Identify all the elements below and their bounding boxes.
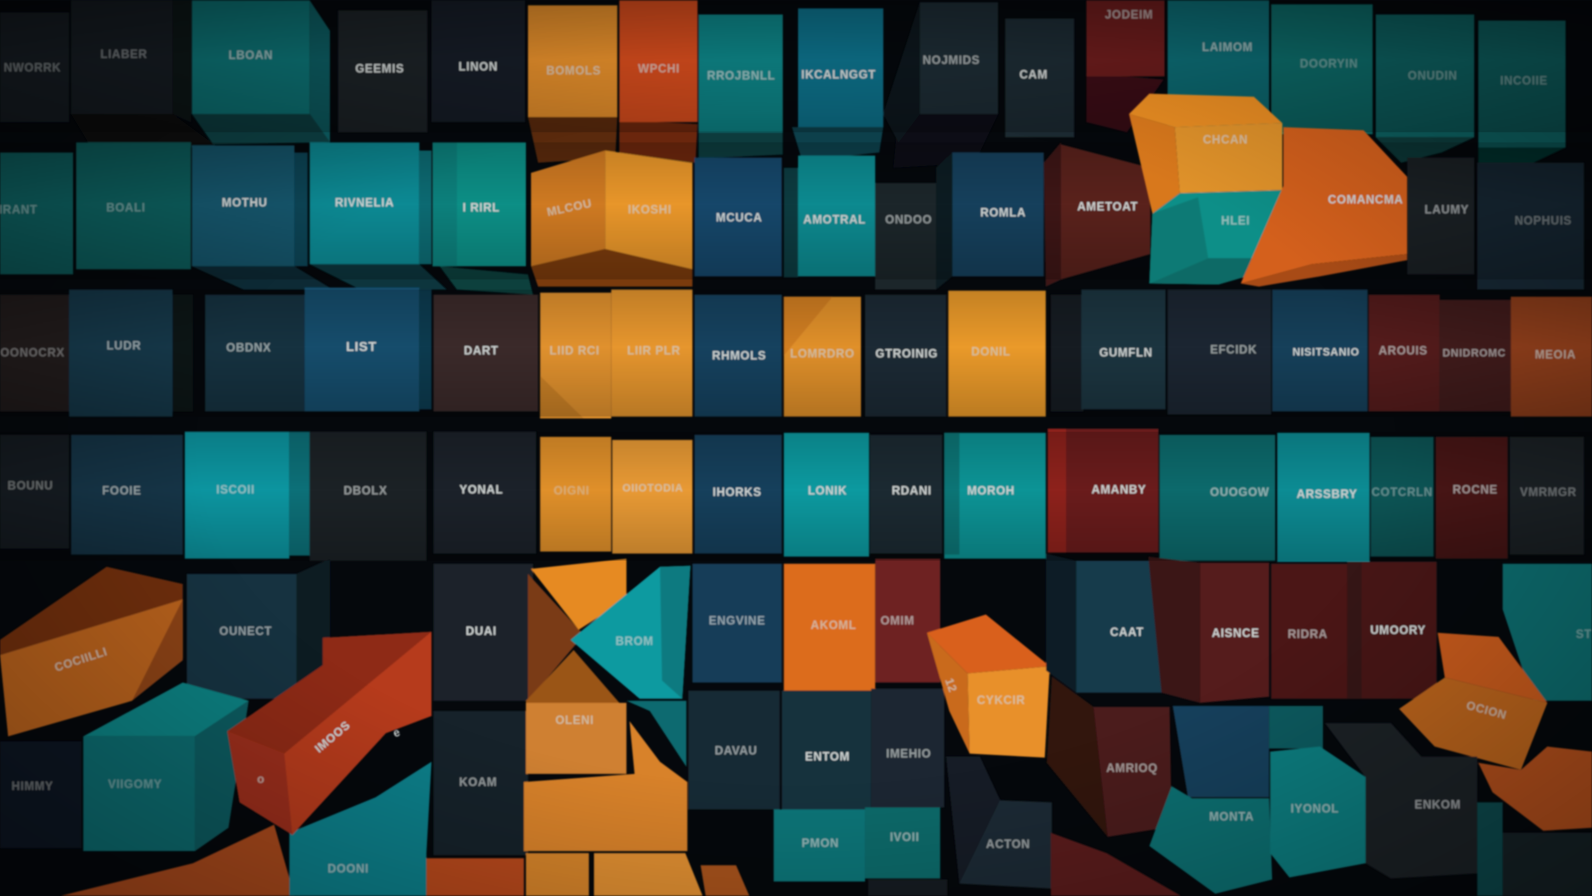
block: row 3 navy: LUDR — [106, 340, 141, 353]
block: teal triangle — [571, 566, 690, 699]
block: row 2 teal: BOALI — [106, 201, 146, 214]
block: orange wedge — [531, 559, 626, 630]
block: row 2 dark far right: NOPHUIS — [1515, 215, 1572, 228]
block: row 4 orange two: OIIOTODIA — [622, 482, 683, 494]
block: row 3 dark far left: OONOCRX — [0, 347, 65, 360]
block: skewed burnt orange — [0, 567, 183, 736]
block: lower teal cube: VIIGOMY — [108, 778, 162, 791]
block: row 2 slate — [875, 183, 936, 290]
block: row 1 slate two: CAM — [1019, 68, 1048, 81]
block: row 5 maroon: OMIM — [880, 615, 915, 628]
block: row 4 charcoal — [310, 432, 426, 561]
block: row 3 navy three: RHMOLS — [712, 350, 766, 363]
block: row 6 slate two — [871, 689, 944, 807]
block: dark tilted — [946, 757, 1052, 889]
block: row 3 slate two: EFCIDK — [1210, 344, 1257, 357]
block: row 4 charcoal three — [1510, 437, 1584, 555]
block: row 3 dark far left — [0, 295, 69, 411]
block: lower teal cube — [83, 683, 249, 851]
block: row 3 orange two: LIIR PLR — [627, 345, 681, 358]
block: row 4 orange: OIGNI — [554, 485, 590, 498]
block: row 3 navy two: OBDNX — [226, 342, 271, 355]
block: row 1 teal seven: INCOIIE — [1500, 75, 1548, 88]
block: row 5 maroon — [875, 559, 940, 683]
block: tilted orange: 12 — [942, 677, 959, 694]
block: row 4 charcoal two: YONAL — [459, 484, 503, 497]
block: maroon lower cube: AMRIOQ — [1106, 762, 1158, 775]
block: orange cube: MLCOU — [546, 197, 593, 219]
cluster of tilted cubes above the row shading — [1129, 94, 1407, 287]
block: row 3 slate two — [1168, 290, 1271, 414]
block: row 4 teal three: OUOGOW — [1210, 486, 1269, 499]
block: tilted orange: CYKCIR — [977, 694, 1025, 707]
block: row 1 charcoal — [338, 10, 427, 132]
block: row 5 charcoal: DUAI — [466, 625, 497, 638]
block: row 1 charcoal two — [432, 0, 525, 122]
block: row 4 bright teal — [185, 432, 310, 559]
block: row 3 orange: LIID RCI — [550, 345, 600, 358]
block: maroon lower cube — [1047, 676, 1172, 837]
block: row 2 teal far left — [0, 153, 73, 274]
block: maroon three: UMOORY — [1370, 624, 1426, 637]
block: row 2 teal eight: AMOTRAL — [803, 214, 866, 227]
block: row 6 navy — [782, 691, 871, 812]
block: row 4 teal four: ARSSBRY — [1297, 488, 1357, 501]
block: row 6 charcoal — [434, 711, 528, 855]
block: row 3 slate: GTROINIG — [875, 348, 938, 361]
block: row 4 maroon red: AMANBY — [1091, 484, 1146, 497]
block: row 3 orange three — [784, 297, 861, 417]
block: right teal: ST — [1576, 628, 1592, 641]
block: orange cube: IKOSHI — [628, 203, 672, 216]
block: tilted orange cube: CHCAN — [1203, 133, 1248, 146]
block: row 1 orange — [528, 5, 617, 163]
block: row 1 teal six: ONUDIN — [1408, 69, 1457, 82]
block: tilted red: e — [391, 726, 402, 740]
block: row 2 dark right — [1407, 158, 1474, 274]
block: row 2 blue — [192, 145, 333, 290]
block: bottom teal — [289, 762, 432, 896]
block: row 3 orange three: LOMRDRO — [790, 348, 855, 361]
block: row 1 teal three: RROJBNLL — [707, 69, 775, 82]
row shading overlays — [0, 0, 1592, 561]
block: row 3 brown — [434, 295, 538, 411]
block: row 4 teal five: COTCRLN — [1372, 486, 1433, 499]
block: row 3 navy three — [694, 295, 782, 417]
block: row 3 navy — [69, 290, 193, 417]
block: row 4 dark far left — [0, 435, 69, 549]
block: row 1 red orange: WPCHI — [638, 62, 680, 75]
block: row 2 dark far right — [1477, 163, 1584, 290]
block: row 2 navy — [936, 153, 1044, 290]
block: row 2 green teal: I RIRL — [463, 201, 500, 214]
block: maroon three — [1347, 562, 1437, 699]
block: row 4 slate: RDANI — [892, 485, 932, 498]
block: right teal — [1503, 564, 1592, 701]
block: row 4 teal: LONIK — [808, 485, 847, 498]
block: lower dark right — [1325, 723, 1477, 878]
block: row 4 orange — [540, 437, 611, 552]
block: row 4 navy two: IHORKS — [713, 486, 762, 499]
block: row 1 maroon: JODEIM — [1105, 9, 1153, 22]
block: row 2 blue two — [694, 158, 782, 276]
block: row 5 orange — [784, 564, 875, 691]
block: row 1 dark — [71, 0, 218, 147]
block: row 1 teal four — [1168, 0, 1269, 127]
block: bottom teal small two: IVOII — [890, 831, 919, 844]
block: bottom teal small: PMON — [802, 837, 839, 850]
block: row 1 teal three — [699, 14, 783, 159]
block: row 1 red orange — [619, 0, 698, 163]
block: row 4 maroon red — [1048, 429, 1158, 553]
block: row 4 teal five — [1371, 437, 1434, 557]
block: row 6 slate: DAVAU — [715, 745, 757, 758]
block: row 3 navy four: NISITSANIO — [1292, 346, 1360, 358]
block: row 2 navy: ROMLA — [980, 207, 1026, 220]
block: row 4 bright teal: ISCOII — [216, 484, 255, 497]
block: row 3 orange — [540, 293, 611, 419]
block: row 1 dark far left: NWORRK — [4, 61, 61, 74]
block: tilted red — [227, 632, 432, 835]
block: bottom teal small two — [865, 807, 940, 878]
block: row 2 teal — [76, 142, 191, 269]
block: row 3 maroon: AROUIS — [1379, 345, 1428, 358]
block: row 1 teal — [192, 0, 330, 144]
block: bottom burnt orange — [61, 825, 294, 896]
block: bottom teal small — [774, 809, 865, 882]
block: row 2 slate: ONDOO — [885, 214, 932, 227]
block: maroon two — [1271, 564, 1347, 699]
block: row 3 maroon — [1369, 295, 1440, 411]
block: lower teal: MONTA — [1209, 811, 1254, 824]
block: row 2 bright teal — [310, 142, 447, 290]
block: row 2 maroon — [1044, 142, 1150, 287]
block: row 1 teal seven — [1478, 21, 1566, 168]
block: dark tilted: ACTON — [986, 838, 1030, 851]
block: row 1 blue teal — [792, 8, 883, 161]
block: bottom maroon — [1051, 833, 1181, 896]
block: row 1 slate two — [1005, 19, 1074, 137]
block: row 6 charcoal: KOAM — [459, 776, 497, 789]
block: row 3 maroon two: DNIDROMC — [1442, 347, 1506, 359]
block: bottom dark sliver — [868, 880, 947, 896]
block: row 1 teal five — [1271, 4, 1373, 134]
block: navy right of center — [1046, 554, 1163, 693]
block: right tilted burnt orange: OCION — [1465, 699, 1508, 722]
block: orange step — [526, 650, 626, 774]
block: lower dark right: ENKOM — [1414, 798, 1461, 811]
block: row 1 maroon — [1086, 0, 1165, 132]
block: row 2 maroon: AMETOAT — [1077, 200, 1138, 213]
block: row 3 brown: DART — [464, 345, 499, 358]
block: row 6 slate two: IMEHIO — [886, 748, 931, 761]
block: row 4 charcoal two — [434, 432, 536, 554]
block: maroon cube — [1148, 557, 1269, 703]
block: tilted red: IMOOS — [313, 719, 353, 755]
block: row 5 charcoal — [434, 564, 533, 701]
block: row 4 teal two: MOROH — [967, 485, 1015, 498]
block: row 2 teal eight — [784, 156, 875, 277]
block: skewed burnt orange: COCIILLI — [53, 645, 109, 674]
block: row 4 maroon two — [1436, 437, 1508, 559]
block: row 5 navy two — [692, 564, 782, 683]
block: row 4 teal four — [1277, 433, 1370, 562]
block: row 5 navy with side: OUNECT — [219, 625, 272, 638]
block: row 4 teal — [784, 433, 869, 557]
block: big orange slab — [524, 721, 687, 851]
block: row 1 orange: BOMOLS — [546, 64, 601, 77]
block: brown triangle — [528, 574, 584, 701]
block: bottom rust — [701, 865, 749, 896]
block: row 1 charcoal two: LINON — [459, 60, 498, 73]
block: row 2 blue two: MCUCA — [716, 212, 762, 225]
block: row 1 slate — [883, 2, 998, 168]
block: row 4 navy: FOOIE — [102, 485, 141, 498]
block: row 3 blue: LIST — [346, 339, 377, 354]
block: row 6 navy: ENTOM — [805, 751, 850, 764]
block: bottom burnt center — [426, 858, 524, 896]
block: row 1 teal six — [1376, 14, 1474, 163]
block: row 5 navy two: ENGVINE — [709, 615, 765, 628]
block: row 2 teal far left: IRANT — [0, 203, 38, 216]
block: row 1 teal: LBOAN — [229, 49, 273, 62]
block: right burnt lower — [1478, 746, 1592, 831]
block: row 3 bright orange — [948, 291, 1046, 417]
block: burnt orange cube: COMANCMA — [1328, 193, 1403, 206]
block: row 4 navy — [71, 435, 183, 555]
block: row 4 dark far left: BOUNU — [8, 480, 53, 493]
block: right tilted burnt orange — [1399, 633, 1547, 770]
block: row 3 blue — [305, 288, 432, 411]
block: bottom right teal — [1477, 802, 1503, 896]
block: bottom orange two — [594, 853, 703, 896]
block: teal triangle: BROM — [616, 635, 654, 648]
block: tilted red: o — [257, 773, 265, 786]
block: maroon two: RIDRA — [1288, 628, 1328, 641]
block: row 1 dark: LIABER — [100, 48, 147, 61]
block: small teal behind — [626, 701, 686, 767]
block: left dark lower: HIMMY — [12, 780, 53, 793]
block: row 4 teal three — [1159, 435, 1275, 561]
block: navy right of center: CAAT — [1110, 626, 1144, 639]
block: row 4 maroon two: ROCNE — [1453, 484, 1498, 497]
block: burnt orange cube — [1241, 127, 1407, 287]
block: row 6 slate — [688, 691, 780, 809]
block: row 1 charcoal: GEEMIS — [355, 62, 404, 75]
block: row 3 maroon two — [1440, 300, 1511, 411]
block: row 1 dark far left — [0, 12, 69, 122]
block: row 3 rust: MEOIA — [1535, 349, 1576, 362]
block: row 3 slate blue: GUMFLN — [1099, 347, 1153, 360]
block: orange cube — [531, 151, 692, 287]
block: row 3 bright orange: DONIL — [971, 346, 1011, 359]
block: maroon cube: AISNCE — [1212, 627, 1259, 640]
block: row 4 charcoal three: VMRMGR — [1520, 486, 1577, 499]
block: row 4 navy two — [694, 435, 782, 554]
block: row 4 charcoal: DBOLX — [344, 485, 387, 498]
block: row 4 orange two — [612, 440, 692, 554]
block: row 1 teal five: DOORYIN — [1300, 57, 1358, 70]
block: row 3 navy four — [1272, 290, 1368, 411]
block: lower teal — [1149, 786, 1272, 894]
block: teal under orange: HLEI — [1221, 215, 1250, 228]
block: row 1 teal four: LAIMOM — [1202, 41, 1253, 54]
block: lower blue — [1173, 706, 1269, 797]
block: bottom teal: DOONI — [328, 862, 369, 875]
block: orange step: OLENI — [555, 714, 594, 727]
block: lower dark teal — [1269, 706, 1323, 749]
block: tilted orange cube — [1129, 94, 1282, 213]
block: teal under orange — [1149, 190, 1282, 285]
block: row 4 teal two — [944, 433, 1046, 559]
block: tilted orange — [927, 615, 1050, 758]
block: row 3 navy two — [205, 295, 305, 411]
block: row 3 slate — [865, 295, 946, 417]
block: row 5 navy with side — [187, 559, 330, 699]
block: lower teal two — [1270, 746, 1366, 877]
block: row 3 rust — [1511, 297, 1592, 417]
block: row 3 orange two — [611, 290, 692, 417]
block: row 2 dark right: LAUMY — [1425, 203, 1469, 216]
block: row 4 slate — [870, 435, 942, 554]
block: bottom right dark — [1503, 833, 1592, 896]
block: row 3 slate blue — [1051, 290, 1166, 411]
block: row 5 orange: AKOML — [811, 619, 856, 632]
block: row 2 green teal — [433, 142, 533, 295]
block: row 2 bright teal: RIVNELIA — [335, 196, 394, 209]
block: row 1 blue teal: IKCALNGGT — [801, 68, 876, 81]
block: bottom orange — [526, 853, 589, 896]
block: lower teal two: IYONOL — [1291, 803, 1339, 816]
block: row 1 slate: NOJMIDS — [923, 54, 980, 67]
block: left dark lower — [0, 741, 81, 848]
block: row 2 blue: MOTHU — [222, 196, 268, 209]
